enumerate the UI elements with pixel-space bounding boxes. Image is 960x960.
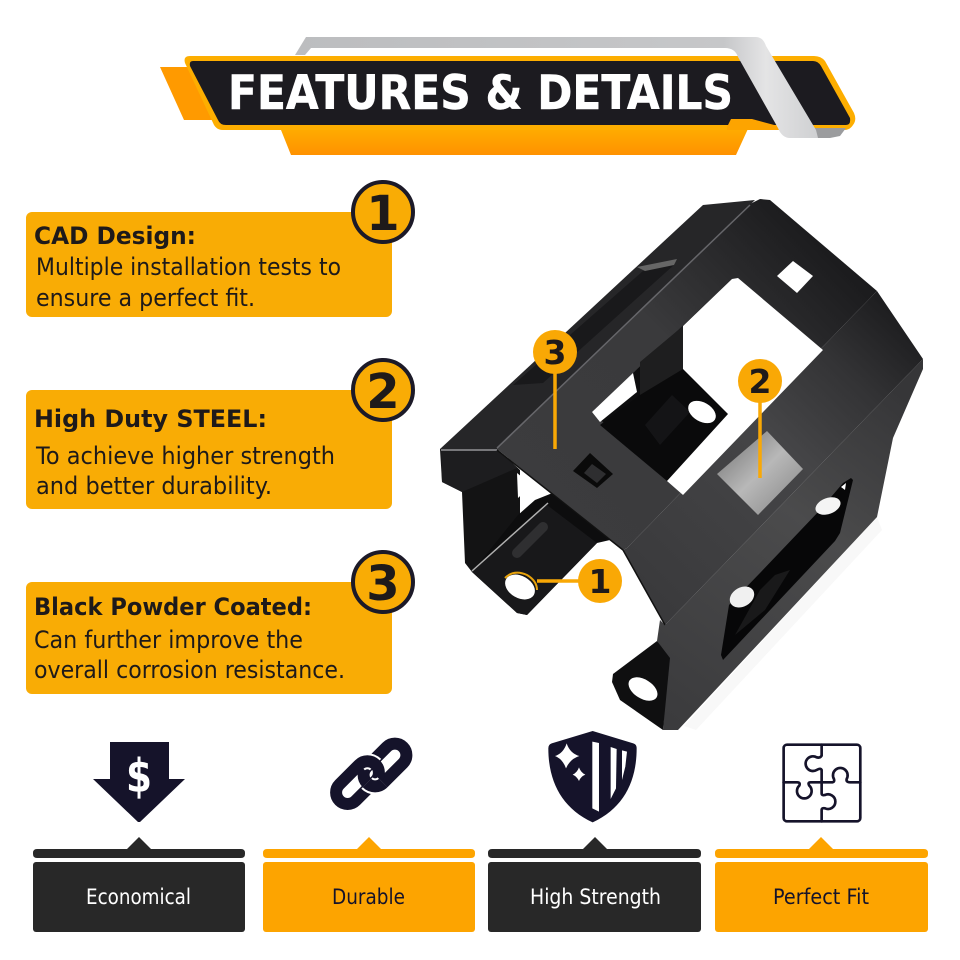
rear flange slot	[684, 396, 720, 428]
leader line	[758, 385, 762, 478]
feature tile: Perfect Fit: Perfect Fit	[773, 885, 869, 909]
rear wall slot	[637, 259, 677, 271]
callout 1	[505, 559, 622, 603]
badge	[533, 330, 577, 374]
front flange face	[472, 505, 597, 615]
front rail dark base	[472, 490, 610, 615]
side face	[657, 359, 923, 730]
panel: black powder coated	[26, 552, 413, 694]
icon: chain link	[331, 739, 411, 809]
feature tile: High Strength	[488, 837, 701, 932]
product photo: black steel bracket	[440, 199, 923, 730]
second white opening	[592, 373, 637, 422]
callout 2: 2	[749, 362, 771, 401]
number badge 3: 3	[366, 556, 400, 612]
rail highlight	[472, 503, 548, 571]
leader line	[537, 579, 590, 583]
number badge 3	[353, 552, 413, 612]
heading: Black Powder Coated:	[34, 593, 312, 621]
heading: CAD Design:	[34, 222, 196, 250]
main window opening	[592, 279, 823, 495]
chamfer band	[623, 291, 923, 625]
feature tile: Perfect Fit	[715, 837, 928, 932]
icon: puzzle	[784, 745, 860, 821]
icon: price down arrow	[93, 742, 185, 822]
callout 3: 3	[544, 333, 566, 372]
body text: To achieve higher strength	[35, 442, 335, 470]
bottom flange slot	[624, 672, 662, 706]
body text: Can further improve the	[34, 626, 303, 654]
body text: Multiple installation tests to	[36, 253, 341, 281]
soft floor shadow	[684, 517, 882, 730]
icon: price down arrow: $	[126, 749, 152, 803]
number badge 2: 2	[366, 364, 400, 420]
callout 2	[738, 359, 782, 478]
feature tile: Economical	[33, 837, 245, 932]
panel background	[26, 212, 392, 317]
body text: ensure a perfect fit.	[36, 284, 255, 312]
side window near hole	[726, 582, 758, 612]
panel background	[26, 390, 392, 509]
number badge 2	[353, 360, 413, 420]
banner black plate	[190, 61, 850, 125]
panel background	[26, 582, 392, 694]
banner left orange tail	[160, 67, 215, 120]
big white opening	[667, 278, 823, 495]
title banner	[160, 37, 855, 155]
rear flange gloss	[645, 395, 690, 445]
left end edge highlight	[441, 449, 497, 451]
title text: FEATURES & DETAILS	[228, 66, 733, 121]
side window far hole	[813, 494, 843, 518]
side window gloss	[735, 570, 790, 635]
callout 3	[533, 330, 577, 449]
silver ribbon	[295, 37, 818, 138]
bare steel patch	[717, 431, 803, 515]
side window	[721, 478, 853, 660]
feature tile: High Strength: High Strength	[530, 885, 661, 909]
ribbon back fold	[812, 128, 846, 138]
small front hole	[573, 453, 613, 488]
plate front edge	[497, 450, 665, 625]
plate bend highlight	[497, 205, 750, 448]
bottom flange	[612, 641, 670, 730]
number badge 1	[353, 182, 413, 242]
heading: High Duty STEEL:	[34, 405, 267, 433]
leader line	[553, 355, 557, 449]
square hole	[777, 261, 813, 293]
left end lip	[441, 449, 517, 492]
left end face	[440, 449, 520, 572]
panel: high duty steel	[26, 360, 413, 509]
flange gloss	[517, 527, 543, 553]
rear flange	[600, 369, 728, 481]
icon: shield	[548, 731, 637, 822]
body text: and better durability.	[36, 472, 272, 500]
number badge 1: 1	[366, 186, 400, 242]
feature tile: Durable: Durable	[332, 885, 405, 909]
badge	[578, 559, 622, 603]
left wall white gap	[517, 473, 532, 498]
rear left wall	[440, 200, 755, 449]
feature tile: Durable	[263, 837, 475, 932]
front flange slot	[501, 569, 539, 605]
badge	[738, 359, 782, 403]
body text: overall corrosion resistance.	[34, 656, 345, 684]
ring around slot	[505, 573, 537, 590]
rear wall recess	[513, 264, 675, 385]
rear rail wall	[640, 326, 683, 410]
panel: CAD design	[26, 182, 413, 317]
side window corner gap	[841, 483, 846, 490]
banner lower orange tab	[279, 120, 752, 155]
callout 1: 1	[589, 562, 611, 601]
top plate	[497, 199, 877, 550]
banner orange notch	[727, 119, 780, 130]
feature tile: Economical: Economical	[86, 885, 191, 909]
banner gold frame	[185, 56, 855, 130]
